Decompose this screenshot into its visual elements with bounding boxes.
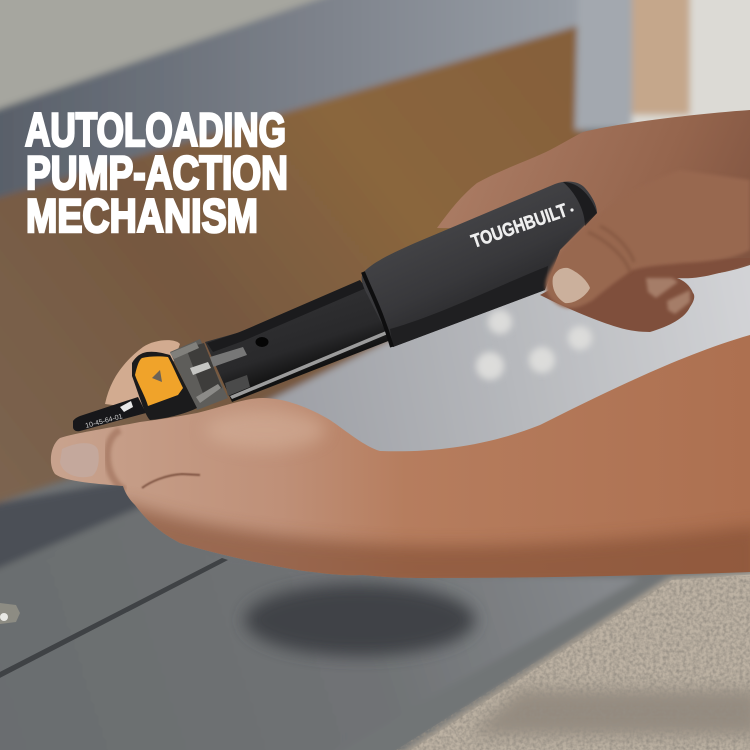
headline: AUTOLOADING bbox=[25, 103, 286, 156]
headline: PUMP-ACTION bbox=[26, 146, 288, 199]
right thumb bbox=[545, 170, 750, 308]
left thumb nail bbox=[60, 443, 99, 477]
background: bright fittings bbox=[476, 310, 592, 380]
background: lower ledge bbox=[0, 480, 145, 572]
headline: MECHANISM bbox=[26, 189, 258, 242]
orange button bbox=[135, 356, 183, 406]
background: tan strip bbox=[632, 0, 690, 115]
right thumb nail bbox=[553, 268, 590, 303]
grip collar line bbox=[363, 272, 392, 347]
background: carpet bbox=[392, 572, 750, 750]
background: carpet texture bbox=[396, 574, 750, 750]
right hand back bbox=[437, 110, 750, 300]
shaft lower highlight bbox=[230, 331, 388, 399]
background: right pale wall bbox=[620, 0, 750, 340]
background: brown panel bbox=[0, 22, 585, 505]
background: pale right surface bbox=[230, 240, 750, 480]
background: gray beam bbox=[0, 0, 590, 200]
clear collar bbox=[170, 339, 228, 410]
background: vertical post bbox=[575, 0, 632, 130]
left finger behind tool bbox=[105, 340, 180, 410]
background: metal hinge bbox=[0, 603, 20, 624]
forearm and left hand bbox=[51, 335, 750, 590]
brand logo: TOUGHBUILT bbox=[469, 200, 570, 253]
headline bbox=[25, 103, 288, 242]
grip lower band bbox=[390, 266, 548, 347]
right thumb knuckle shading bbox=[588, 226, 634, 272]
background: upper wall bbox=[0, 0, 345, 112]
shaft top rail bbox=[207, 280, 366, 352]
right hand fingers bbox=[540, 258, 750, 332]
background: table front edge bbox=[322, 578, 668, 750]
lower slot bbox=[225, 375, 250, 396]
shaft slot bbox=[210, 347, 247, 367]
palm crease bbox=[142, 474, 200, 488]
arm shading bbox=[107, 410, 750, 590]
bit bbox=[73, 397, 146, 431]
screwdriver tool bbox=[73, 181, 597, 431]
bit marking: 10-45-64-01 bbox=[85, 413, 123, 430]
grip bbox=[362, 181, 597, 347]
bit logo bbox=[120, 401, 133, 412]
right finger nails bbox=[646, 278, 690, 314]
shaft bbox=[205, 280, 396, 402]
shaft hole bbox=[256, 337, 268, 347]
rubber nose bbox=[132, 352, 197, 420]
grip end dark cap bbox=[563, 182, 597, 226]
background: table shadow bbox=[245, 584, 475, 656]
background: table seam bbox=[0, 558, 228, 683]
background: gray table surface bbox=[0, 505, 665, 750]
